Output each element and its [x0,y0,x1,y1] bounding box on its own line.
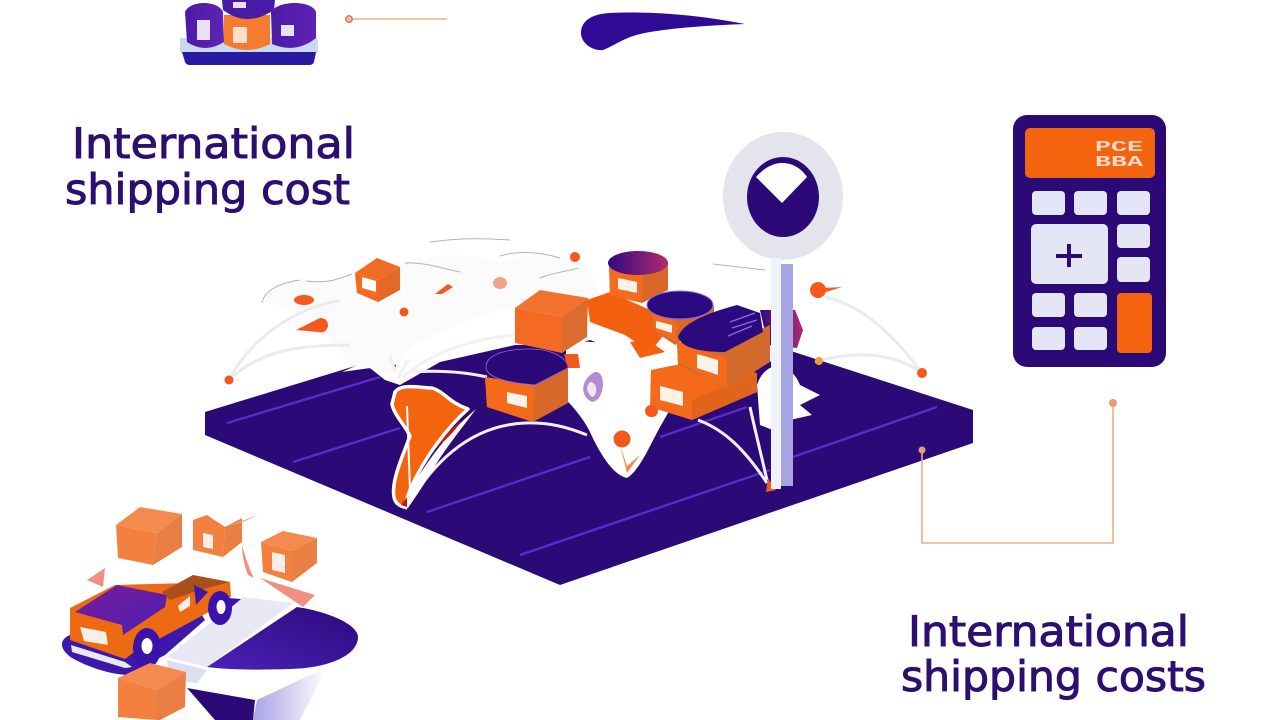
truck body [70,582,231,659]
truck bed [162,575,230,600]
calculator [1013,115,1166,367]
box: round lid front [485,349,580,422]
heading: bottom right: shipping costs [901,652,1206,701]
truck roof [75,585,167,635]
pink accents [87,545,315,607]
delivery truck scene [62,507,358,720]
wheel: front [133,628,161,668]
box B [193,515,258,557]
box: orange stack behind [587,292,668,358]
plinth side [253,667,327,720]
box: north america [355,258,400,302]
wheel: rear [208,591,241,625]
box A [116,507,182,565]
box: bottom right large [677,305,770,389]
shipping route arcs [229,297,922,507]
south america [392,387,476,510]
box: magenta behind pole [760,310,803,348]
top icon: crates on pallet [180,0,318,65]
display digits [1095,139,1143,171]
heading: top left: International [72,119,355,168]
heading: bottom right: International [908,607,1189,656]
heading: top left: shipping cost [65,165,350,214]
display digits: PCE [1095,139,1143,156]
keys [1031,191,1150,350]
route markers [224,252,927,492]
display digits: BBA [1095,154,1143,171]
box: bottom right stack [645,360,757,420]
box: purple lid middle [647,291,714,345]
truck window [178,596,190,612]
plus sign [1056,244,1082,267]
equals key [1117,293,1152,353]
truck shadow [62,612,205,675]
truck grille [80,627,108,645]
location pin [723,132,843,489]
calculator display [1025,128,1155,178]
connector: top line [346,16,447,22]
heading: bottom right [901,607,1206,701]
swoosh shape [581,12,745,50]
road [167,597,293,667]
heading: top left [65,119,355,214]
box C [261,531,317,582]
world map: land masses [262,239,820,478]
purple disc [207,607,358,670]
box: large upper left [515,290,588,353]
platform slab [205,290,973,585]
box: purple lid top [608,251,668,303]
connector: platform to calculator [918,399,1117,543]
box D [118,663,186,720]
